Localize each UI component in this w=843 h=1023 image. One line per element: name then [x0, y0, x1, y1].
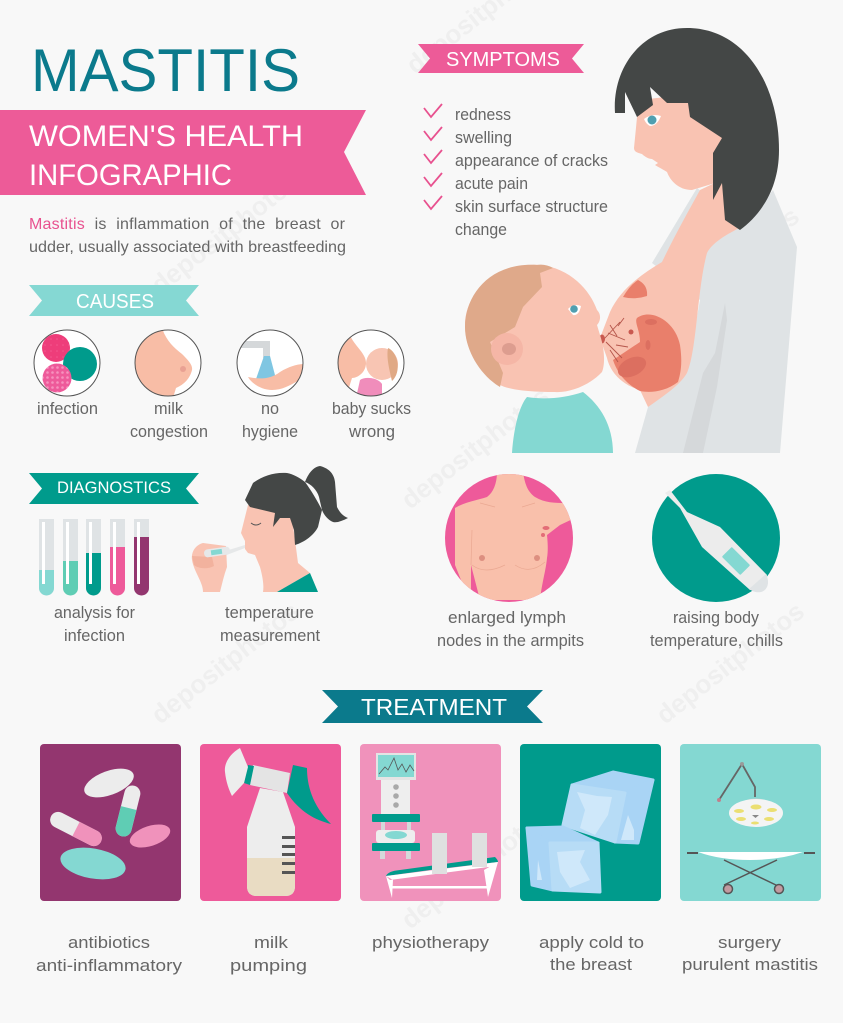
analysis label: infection	[64, 626, 125, 645]
watermark: depositphotos	[645, 201, 805, 335]
lymph label	[437, 608, 584, 650]
treatment: milk pumping	[200, 744, 341, 901]
treatment labels: surgery	[682, 933, 818, 974]
illustration: woman taking temperature	[192, 466, 348, 592]
intro text: udder, usually associated with breastfeeding	[29, 239, 346, 256]
symptoms list	[424, 104, 608, 239]
watermark: depositphotos	[145, 596, 305, 730]
watermark	[145, 0, 810, 935]
cause: baby sucks wrong: baby sucks	[332, 399, 411, 418]
treatment labels: surgery: purulent mastitis	[682, 955, 818, 974]
treatment labels: antibiotics: anti-inflammatory	[36, 956, 183, 975]
symptoms list: appearance of cracks	[455, 151, 608, 170]
cause: baby sucks wrong	[332, 325, 411, 441]
cause: no hygiene: hygiene	[242, 422, 298, 441]
lymph label: enlarged lymph	[448, 608, 566, 627]
watermark: depositphotos	[650, 596, 810, 730]
title: MASTITIS	[31, 37, 300, 104]
treatment labels: milk pumping	[230, 933, 307, 975]
treatment labels: surgery: surgery	[718, 933, 782, 952]
illustration: thermometer	[652, 474, 780, 602]
intro text	[29, 216, 346, 256]
illustration: mother	[599, 28, 797, 453]
body temperature label	[650, 608, 783, 650]
treatment labels: apply cold	[539, 933, 644, 974]
watermark: depositphotos	[395, 381, 555, 515]
cause: baby sucks wrong: wrong	[348, 422, 395, 441]
lymph label: nodes in the armpits	[437, 631, 584, 650]
causes banner: CAUSES	[76, 291, 154, 313]
cause: no hygiene	[237, 330, 305, 441]
watermark: depositphotos	[145, 166, 305, 300]
symptoms list: acute pain	[455, 174, 528, 193]
subtitle banner: INFOGRAPHIC	[29, 159, 232, 192]
analysis label: analysis for	[54, 603, 135, 622]
treatment: surgery	[680, 744, 821, 901]
symptoms banner: SYMPTOMS	[446, 49, 560, 71]
temperature label: measurement	[220, 626, 320, 645]
test tubes	[39, 519, 149, 596]
temperature label	[220, 603, 320, 645]
cause: no hygiene: no	[261, 399, 279, 418]
cause: milk congestion: congestion	[130, 422, 208, 441]
analysis label	[54, 603, 135, 645]
diagnostics banner: DIAGNOSTICS	[57, 478, 171, 497]
cause: milk congestion	[130, 325, 208, 441]
symptoms list: skin surface structure	[455, 197, 608, 216]
subtitle banner	[0, 110, 366, 195]
cause: infection	[34, 330, 100, 418]
treatment labels: antibiotics	[36, 933, 183, 975]
treatment: pills	[40, 744, 181, 901]
treatment labels: antibiotics: antibiotics	[68, 933, 150, 952]
illustration: baby	[465, 265, 613, 453]
treatment banner	[322, 690, 543, 723]
treatment banner: TREATMENT	[361, 694, 507, 720]
symptoms banner	[418, 44, 584, 73]
body temperature label: raising body	[673, 608, 759, 627]
intro text: Mastitis is inflammation of the breast or	[29, 216, 346, 233]
treatment: physiotherapy	[360, 744, 501, 901]
treatment: ice cubes	[520, 744, 661, 901]
causes banner	[29, 285, 199, 316]
treatment labels: milk pumping: pumping	[230, 956, 307, 975]
treatment labels: milk pumping: milk	[254, 933, 289, 952]
temperature label: temperature	[225, 603, 314, 622]
cause: infection: infection	[37, 399, 98, 418]
treatment labels: apply cold: apply cold to	[539, 933, 644, 952]
symptoms list: change	[455, 220, 507, 239]
illustration: enlarged lymph nodes	[445, 472, 575, 602]
cause: milk congestion: milk	[154, 399, 183, 418]
diagnostics banner	[29, 473, 199, 504]
body temperature label: temperature, chills	[650, 631, 783, 650]
symptoms list: swelling	[455, 128, 512, 147]
treatment labels: apply cold: the breast	[550, 955, 632, 974]
symptoms list: redness	[455, 105, 511, 124]
watermark: depositphotos	[395, 801, 555, 935]
subtitle banner: WOMEN'S HEALTH	[29, 120, 303, 153]
treatment labels: physiotherapy: physiotherapy	[372, 933, 490, 952]
